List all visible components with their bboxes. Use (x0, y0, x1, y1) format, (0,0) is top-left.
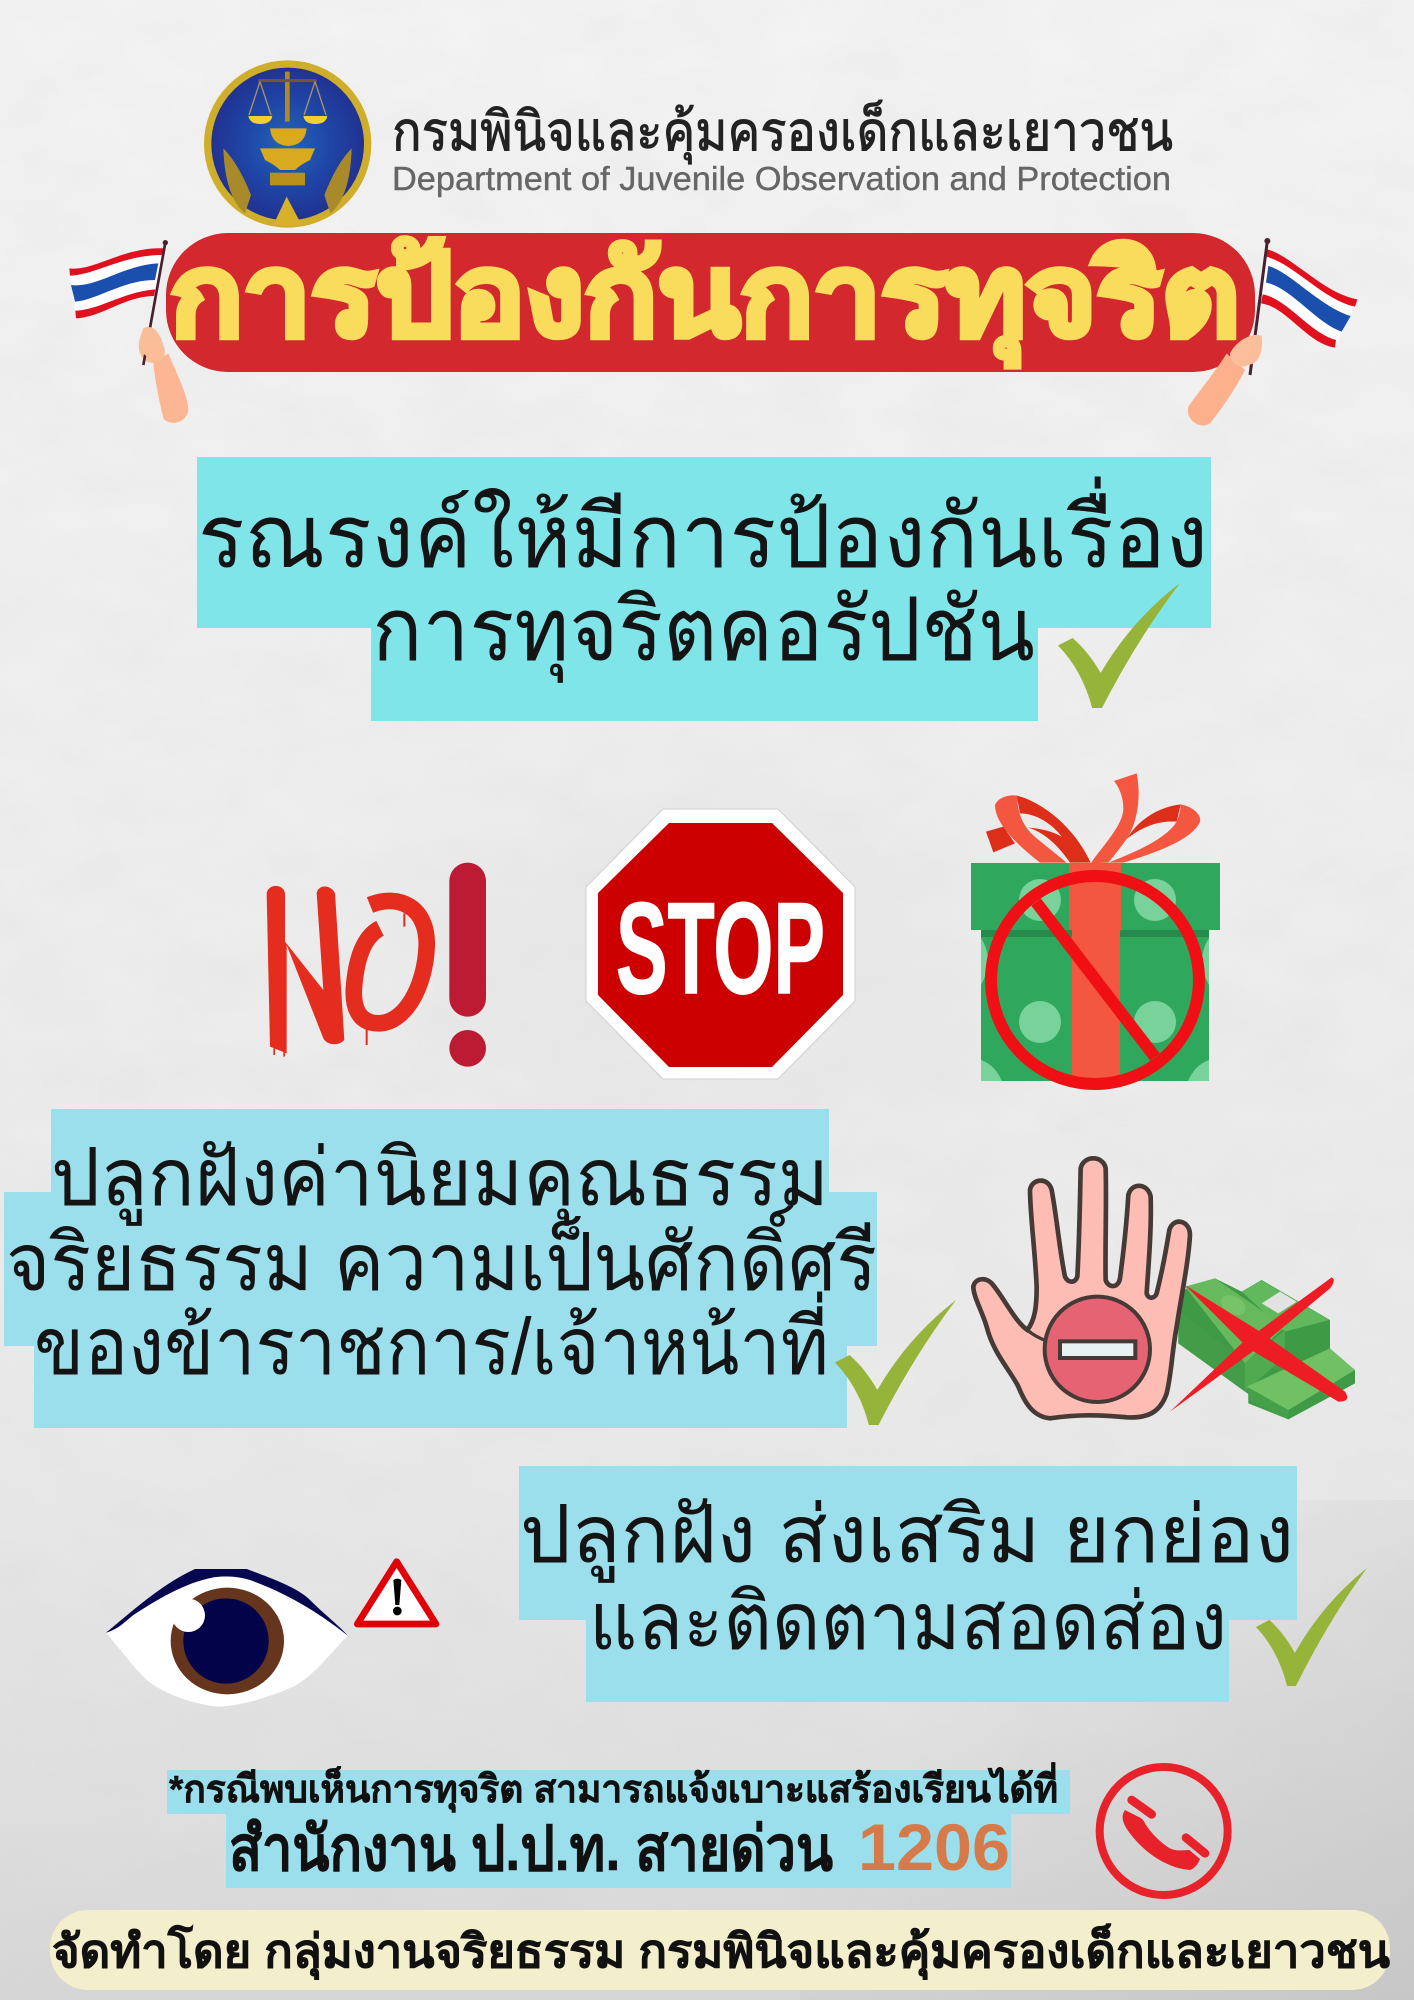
campaign text block 2 (4, 1109, 877, 1428)
icon: crossed-out gift (971, 773, 1220, 1084)
right flag with hand (1188, 238, 1357, 425)
campaign text block 2: จริยธรรม ความเป็นศักดิ์ศรี (6, 1205, 877, 1307)
title banner: การป้องกันการทุจริต (170, 233, 1240, 367)
header: department name in English: Department of Juvenile Observation and Protection (392, 160, 1171, 197)
campaign text block 3: และติดตามสอดส่อง (589, 1577, 1227, 1666)
hotline text block: สำนักงาน ป.ป.ท. สายด่วน (229, 1815, 833, 1884)
hotline text block: 1206 (858, 1810, 1010, 1884)
icon: check mark 1 (1058, 583, 1180, 708)
campaign text block 2: ของข้าราชการ/เจ้าหน้าที่ (34, 1292, 829, 1391)
campaign text block 3 (519, 1466, 1297, 1702)
icon: check mark 3 (1256, 1568, 1367, 1686)
campaign text block 1: การทุจริตคอรัปชัน (372, 580, 1035, 683)
campaign text block 2: ปลูกฝังค่านิยมคุณธรรม (51, 1133, 829, 1226)
icon: stop sign (586, 809, 855, 1079)
footer organiser pill: จัดทำโดย กลุ่มงานจริยธรรม กรมพินิจและคุ้มครองเด็กและเยาวชน (52, 1923, 1391, 1980)
left flag with hand (69, 240, 188, 423)
icon: stop hand with crossed-out money (973, 1158, 1355, 1419)
footer organiser pill (50, 1910, 1391, 1990)
icon: NO graffiti (267, 863, 486, 1067)
hotline text block: *กรณีพบเห็นการทุจริต สามารถแจ้งเบาะแสร้องเรียนได้ที่ (169, 1762, 1058, 1813)
campaign text block 3: ปลูกฝัง ส่งเสริม ยกย่อง (520, 1490, 1294, 1583)
campaign text block 1 (197, 457, 1211, 721)
logo: department seal (208, 64, 368, 225)
icon: watching eye (106, 1569, 348, 1707)
icon: warning triangle (357, 1562, 436, 1624)
icon: check mark 2 (835, 1300, 956, 1425)
campaign text block 1: รณรงค์ให้มีการป้องกันเรื่อง (198, 476, 1208, 586)
hotline text block (167, 1762, 1070, 1888)
icon: telephone (1100, 1767, 1228, 1895)
header: department name in Thai: กรมพินิจและคุ้มครองเด็กและเยาวชน (392, 100, 1173, 165)
icon: stop sign: STOP (616, 875, 825, 1021)
